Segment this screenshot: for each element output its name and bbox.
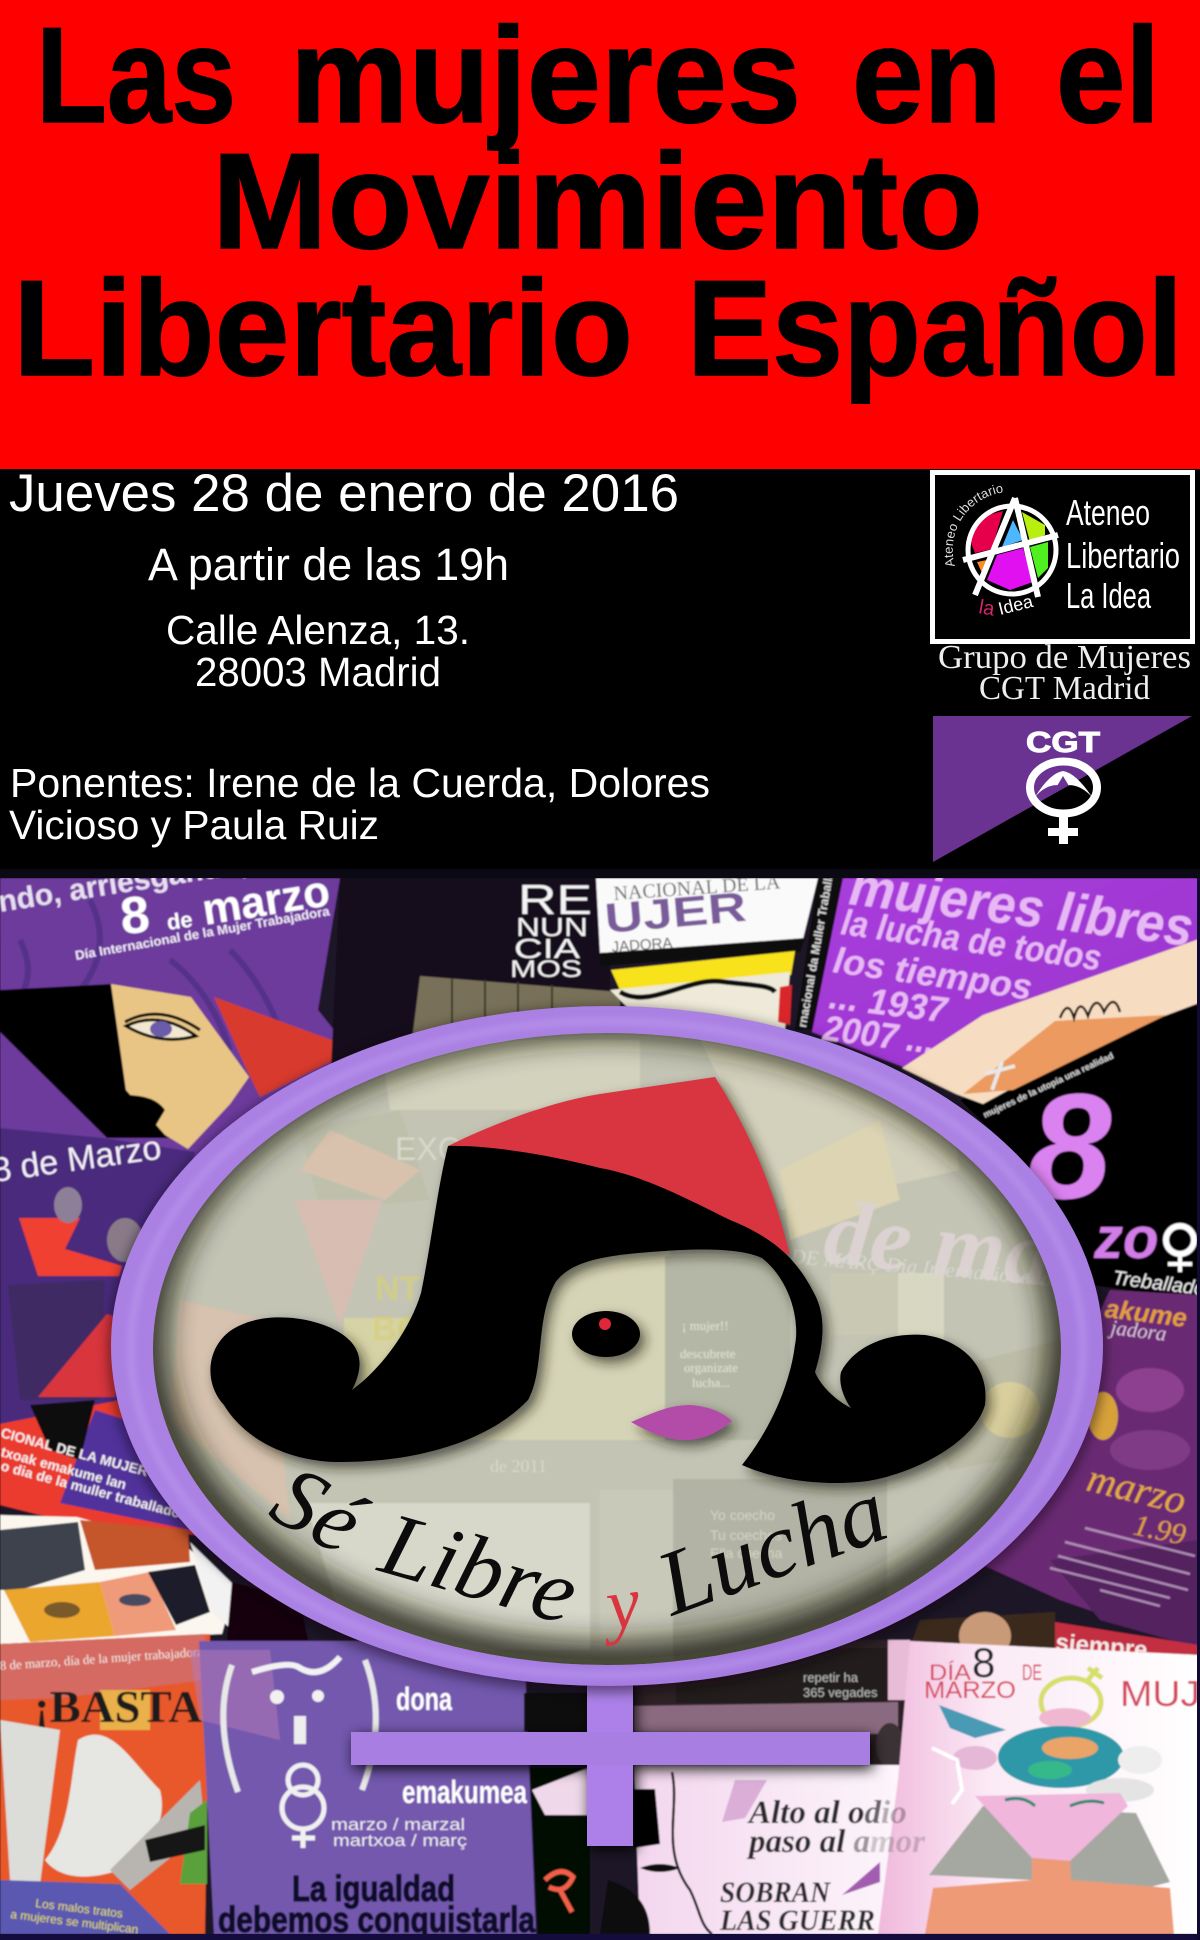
collage piece: left red and purple poster: o dia de la muller traballadora — [0, 1457, 195, 1524]
collage piece: Día 8 de marzo illustrated poster — [878, 1639, 1200, 1934]
collage piece: Renunciamos dark poster: CIA — [514, 933, 580, 964]
slogan word: Libre: Libre — [369, 1493, 588, 1644]
collage piece: La igualdad purple poster: debemos conquistarla — [218, 1899, 536, 1940]
collage piece: La igualdad purple poster: La igualdad — [292, 1868, 455, 1909]
collage piece: Alto al odio poster — [600, 1765, 906, 1934]
collage piece: Renunciamos dark poster: MOS — [510, 956, 582, 983]
guernica figures — [0, 1720, 60, 1900]
bottom navy edge — [0, 1930, 1200, 1940]
collage piece: purple marzo 1.99 poster: jadora — [1106, 1315, 1168, 1346]
female figure logo — [210, 1077, 986, 1483]
collage piece: black red-lettered strip — [226, 1582, 308, 1640]
collage piece: fragmented faces painting — [0, 1515, 235, 1644]
ghosted poster fragments: Yo coecho — [710, 1507, 775, 1523]
collage piece: mujeres libres poster: los tiempos — [831, 939, 1035, 1008]
collage piece: La igualdad purple poster: martxoa / març — [333, 1831, 468, 1850]
Alto al odio poster text: Alto al odio — [747, 1795, 907, 1831]
logo: Ateneo Libertario La Idea: La Idea — [1066, 575, 1152, 616]
venus ring — [111, 1006, 1103, 1686]
logo: Ateneo Libertario La Idea: Ateneo — [1066, 492, 1150, 533]
woman's hair — [929, 1806, 1170, 1895]
event details text — [9, 464, 710, 848]
collage piece: dark strip under ring right: repetir ha — [803, 1670, 859, 1685]
logo: Ateneo Libertario La Idea — [930, 470, 1195, 644]
collage piece: Día 8 de marzo illustrated poster: MARZO — [924, 1677, 1016, 1704]
red Phrygian cap — [448, 1077, 790, 1255]
venus symbol cross — [351, 1670, 870, 1846]
collage piece: Día 8 de marzo illustrated poster: 8 — [972, 1639, 995, 1686]
ghosted poster fragments: BO — [372, 1310, 423, 1348]
pupil — [599, 1318, 611, 1330]
Alto al odio poster text: LAS GUERR — [719, 1904, 875, 1937]
collage piece: mujeres libres poster: la lucha de todos — [839, 901, 1104, 978]
collage piece: Renunciamos dark poster — [330, 879, 622, 1064]
red title band — [0, 0, 1200, 469]
collage piece: left red and purple poster: txoak emakume lan — [0, 1443, 128, 1492]
postal code: 28003 Madrid — [195, 649, 441, 695]
collage piece: Día Internacional de la Mujer poster: rnacional da Muller Traballadora — [795, 845, 841, 1029]
woman's face — [975, 1793, 1128, 1861]
collage piece: La igualdad purple poster — [190, 1641, 536, 1940]
collage piece: mujeres libres poster — [811, 878, 1197, 1068]
yellow venus symbol — [1041, 1668, 1102, 1726]
women's group label — [938, 639, 1191, 707]
collage piece: 8 de marzo face poster: 8 — [118, 886, 152, 946]
venus ring shadow — [109, 1008, 1105, 1692]
slogan word: Lucha: Lucha — [642, 1459, 900, 1635]
collage photo background — [0, 869, 1200, 940]
collage piece: 8 de marzo face poster: ndo, arriesgando, — [0, 847, 250, 919]
collage piece: Día Internacional de la Mujer poster: NACIONAL DE LA — [613, 871, 782, 905]
right navy edge — [1197, 878, 1200, 1940]
title: Libertario — [13, 252, 633, 404]
collage piece: 8 de marzo face poster: de — [165, 907, 194, 935]
collage piece: portrait and red siempre strip: siempre — [1054, 1629, 1149, 1664]
logo: Ateneo Libertario La Idea: Idea — [996, 591, 1036, 619]
lens inner shadow — [147, 1018, 1067, 1662]
collage piece: Renunciamos dark poster: RE — [518, 876, 592, 923]
collage piece: 8 de marzo face poster: Día Internacional de la Mujer Trabajadora — [74, 903, 331, 963]
ghosted poster fragments: EXC — [395, 1131, 461, 1167]
collage piece: Día Internacional de la Mujer poster — [594, 878, 842, 1030]
collage piece: Día Internacional de la Mujer poster: UJER — [603, 883, 748, 942]
collage piece: La igualdad purple poster: emakumea — [402, 1774, 527, 1810]
collage piece: La igualdad purple poster: dona — [396, 1681, 452, 1717]
women's group label: Grupo de Mujeres — [938, 639, 1191, 676]
ghost text: de marzo — [820, 1180, 1174, 1318]
title — [13, 0, 1183, 404]
slogan word: Sé: Sé — [257, 1446, 382, 1575]
black hair — [210, 1146, 986, 1483]
ghosted poster fragments: DE MARÇ Dia Internacional de la Dona — [789, 1244, 1136, 1298]
women's group label: CGT Madrid — [979, 670, 1150, 707]
collage piece: black 8 de marzo poster: 8 — [1028, 1062, 1112, 1230]
collage piece: Día 8 de marzo illustrated poster: DE — [1022, 1660, 1042, 1685]
poster collage — [0, 845, 1200, 1940]
arm illustration — [902, 939, 1199, 1104]
collage piece: dark purple 8 de Marzo poster — [0, 1128, 195, 1430]
ghosted poster fragments: descubrete — [680, 1346, 736, 1361]
lips — [631, 1405, 732, 1440]
collage piece: purple marzo 1.99 poster — [983, 1290, 1199, 1648]
ghosted poster fragments: lucha... — [692, 1375, 730, 1390]
speakers line one: Ponentes: Irene de la Cuerda, Dolores — [10, 760, 710, 806]
black information band — [0, 469, 1200, 878]
collage piece: La igualdad purple poster: marzo / marzal — [331, 1815, 465, 1834]
collage base — [0, 878, 1200, 1938]
ghosted poster fragments: ¡ mujer!! — [682, 1318, 729, 1333]
collage piece: left red and purple poster: CIONAL DE LA MUJER — [0, 1424, 150, 1479]
collage piece: mujeres libres poster: ... 1937 — [827, 975, 951, 1031]
address: Calle Alenza, 13. — [166, 607, 470, 653]
logo: CGT purple flag with venus symbol — [933, 716, 1192, 862]
collage piece: BASTA guernica poster: ¡BASTA — [34, 1681, 202, 1732]
collage piece: BASTA guernica poster: 8 de marzo, día de la mujer trabajadora — [0, 1644, 204, 1673]
title: Las — [36, 0, 236, 151]
ghosted poster fragments — [172, 1040, 1060, 1660]
title: Movimiento — [212, 125, 983, 277]
Alto al odio poster text: paso al amor — [746, 1824, 926, 1860]
ghosted poster fragments: Tu coeches — [710, 1527, 782, 1543]
collage piece: Renunciamos dark poster: NUN — [516, 912, 588, 942]
collage piece: purple marzo 1.99 poster: akume — [1103, 1293, 1189, 1333]
globe illustration — [998, 1726, 1124, 1788]
collage piece: purple marzo 1.99 poster: 1.99 — [1131, 1509, 1189, 1552]
Alto al odio poster text: SOBRAN — [720, 1876, 831, 1909]
collage piece: left red and purple poster — [0, 1399, 196, 1536]
collage piece: 8 de marzo face poster — [0, 878, 341, 1160]
date: Jueves 28 de enero de 2016 — [9, 464, 679, 523]
collage piece: BASTA guernica poster — [0, 1634, 210, 1937]
collage piece: dark strip under ring right — [632, 1640, 910, 1780]
ghosted poster fragments: de 2011 — [490, 1456, 547, 1476]
slogan word: y: y — [594, 1561, 645, 1648]
time: A partir de las 19h — [148, 539, 509, 590]
Alto al odio poster text — [719, 1795, 926, 1937]
collage piece: black 8 de marzo poster: mujeres de la utopía una realidad — [982, 1051, 1115, 1120]
eye — [572, 1311, 640, 1357]
inner lens with ghosted collage — [153, 1033, 1061, 1665]
collage piece: 8 de marzo face poster: marzo — [199, 866, 333, 935]
logo: Ateneo Libertario La Idea: Ateneo Libertario — [944, 484, 1003, 566]
eight and venus mark — [282, 1765, 324, 1848]
ghosted poster fragments: NT — [375, 1270, 421, 1308]
collage piece: Día Internacional de la Mujer poster: JADORA — [611, 935, 673, 956]
collage piece: black 8 de marzo poster: zo — [1093, 1206, 1158, 1271]
collage piece: Día 8 de marzo illustrated poster: MUJ — [1120, 1673, 1200, 1714]
title: mujeres — [290, 0, 801, 151]
title: el — [1056, 0, 1160, 151]
ring highlight — [131, 1021, 1083, 1675]
slogan — [257, 1446, 900, 1648]
collage piece: black 8 de marzo poster — [902, 939, 1200, 1302]
collage piece: dark strip under ring right: 365 vegades — [803, 1685, 878, 1700]
woman's body — [925, 1858, 1174, 1934]
collage piece: black strips beside cross — [524, 1693, 590, 1934]
collage piece: BASTA guernica poster: a mujeres se multiplican — [10, 1907, 139, 1937]
logo: CGT purple flag with venus symbol: CGT — [1026, 727, 1100, 759]
collage piece: Día 8 de marzo illustrated poster: DÍA — [929, 1660, 971, 1685]
ghosted poster fragments: Ella coecha — [710, 1545, 783, 1561]
collage piece: BASTA guernica poster: Los malos tratos — [35, 1896, 124, 1921]
collage piece: portrait and red siempre strip — [912, 1610, 1197, 1656]
speakers line two: Vicioso y Paula Ruiz — [9, 802, 379, 848]
title: en — [852, 0, 1002, 151]
logo: Ateneo Libertario La Idea: la — [977, 596, 997, 621]
collage piece: purple marzo 1.99 poster: marzo — [1083, 1455, 1191, 1523]
ghosted poster fragments: organizate — [684, 1360, 738, 1375]
collage piece: mujeres libres poster: 2007 ... — [820, 1007, 937, 1062]
